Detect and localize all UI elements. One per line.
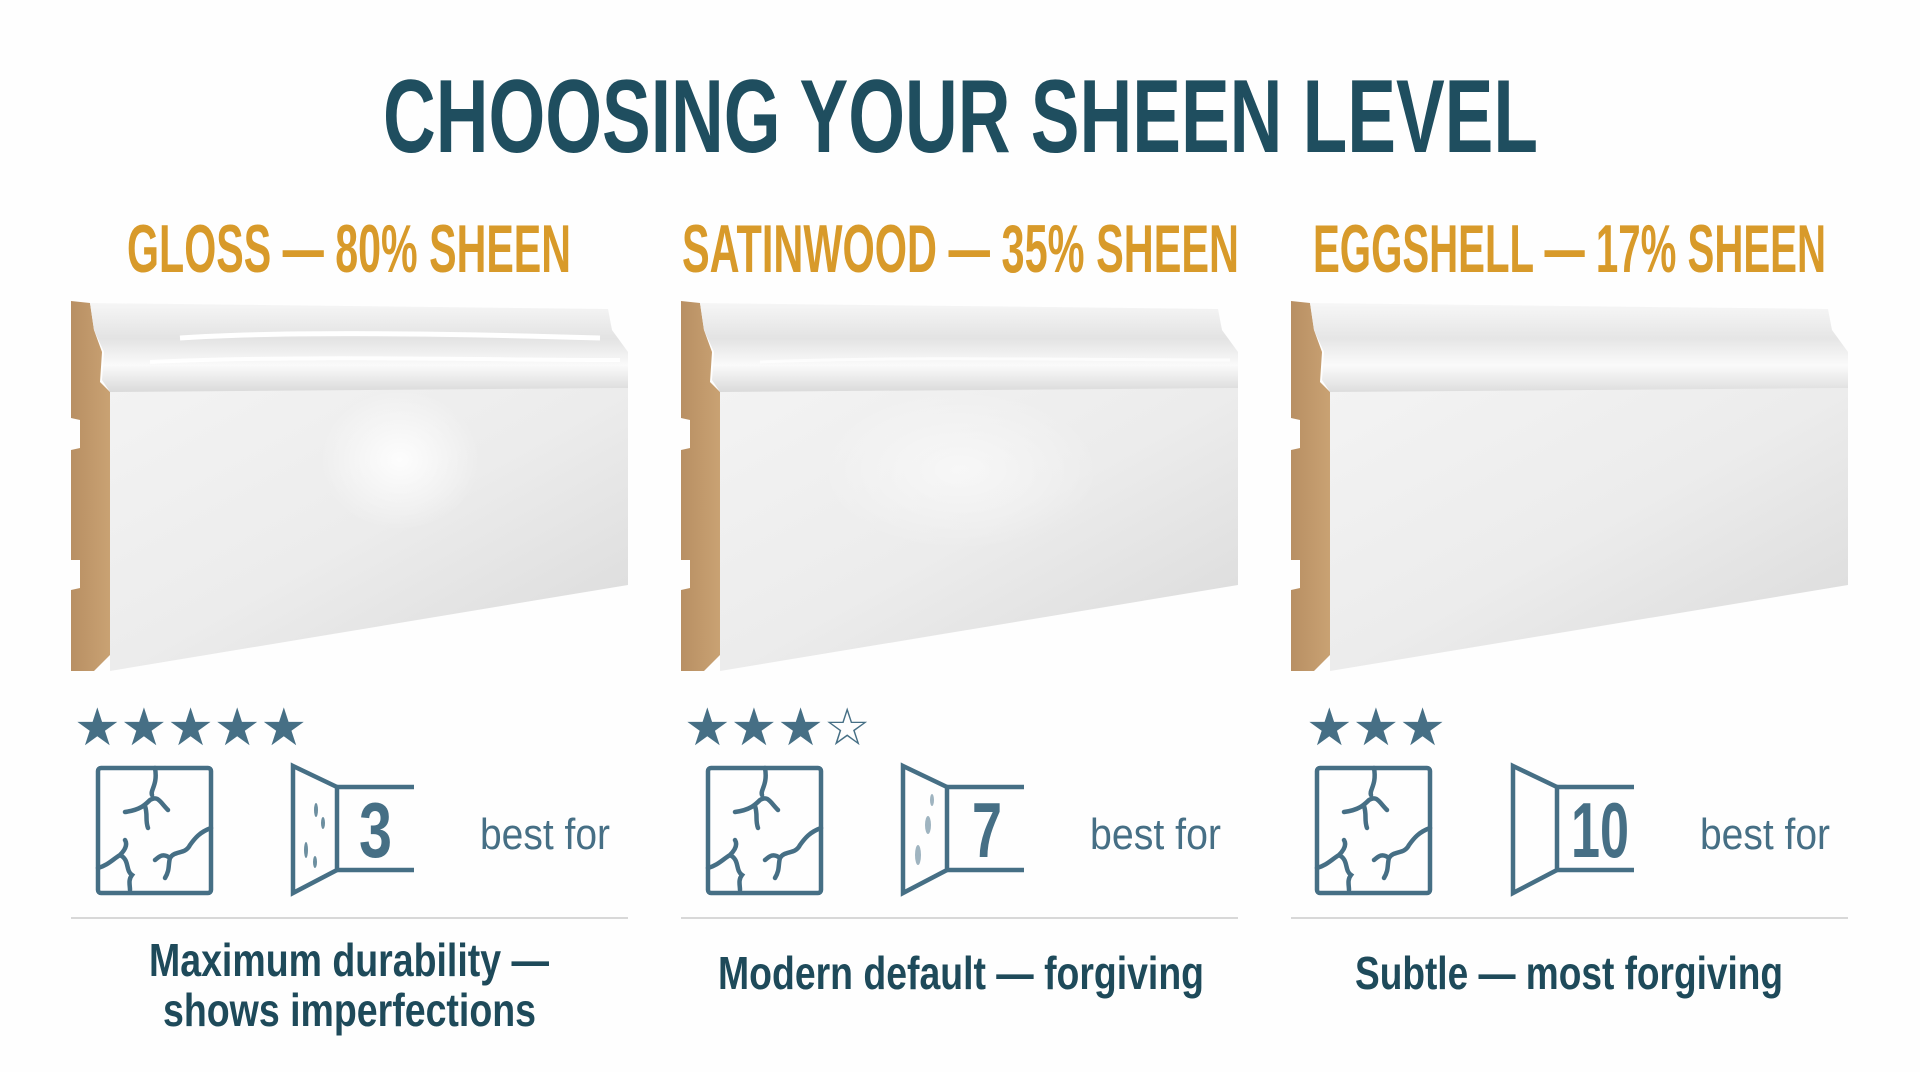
description: satinwood: Modern default — forgiving xyxy=(718,947,1204,999)
description: gloss: Maximum durability — xyxy=(149,934,549,986)
icon: cracks xyxy=(708,768,821,893)
heading: satinwood: SATINWOOD — 35% SHEEN xyxy=(682,211,1239,287)
heading: gloss: GLOSS — 80% SHEEN xyxy=(127,211,571,287)
panel: satinwood xyxy=(681,211,1239,999)
rating: 4.5 stars: ★ xyxy=(820,698,867,758)
board image: gloss xyxy=(71,301,628,671)
board image: satinwood xyxy=(681,301,1238,671)
icon: door with 10: 10 xyxy=(1571,786,1629,874)
description: gloss xyxy=(149,934,549,1036)
icon: door with 3: 3 xyxy=(359,786,392,874)
label: best for: best for xyxy=(480,810,610,859)
board image: eggshell xyxy=(1291,301,1848,671)
description: eggshell: Subtle — most forgiving xyxy=(1355,947,1783,999)
icon: door with 7 xyxy=(903,766,1024,893)
rating: 4.5 stars: ★★★☆ xyxy=(684,698,870,758)
icon: cracks xyxy=(98,768,211,893)
icon: door with 3 xyxy=(293,766,414,893)
description: gloss: shows imperfections xyxy=(163,984,536,1036)
icon: cracks xyxy=(1317,768,1430,893)
panel: gloss xyxy=(71,211,628,1036)
rating: 3 stars: ★★★ xyxy=(1306,698,1446,758)
label: best for: best for xyxy=(1700,810,1830,859)
icon: door with 10 xyxy=(1513,766,1634,893)
rating: 4.5 stars xyxy=(688,708,867,746)
label: best for: best for xyxy=(1090,810,1221,859)
rating: 5 stars: ★★★★★ xyxy=(74,698,307,758)
icon: door with 7: 7 xyxy=(972,786,1002,874)
panel: eggshell xyxy=(1291,211,1848,999)
